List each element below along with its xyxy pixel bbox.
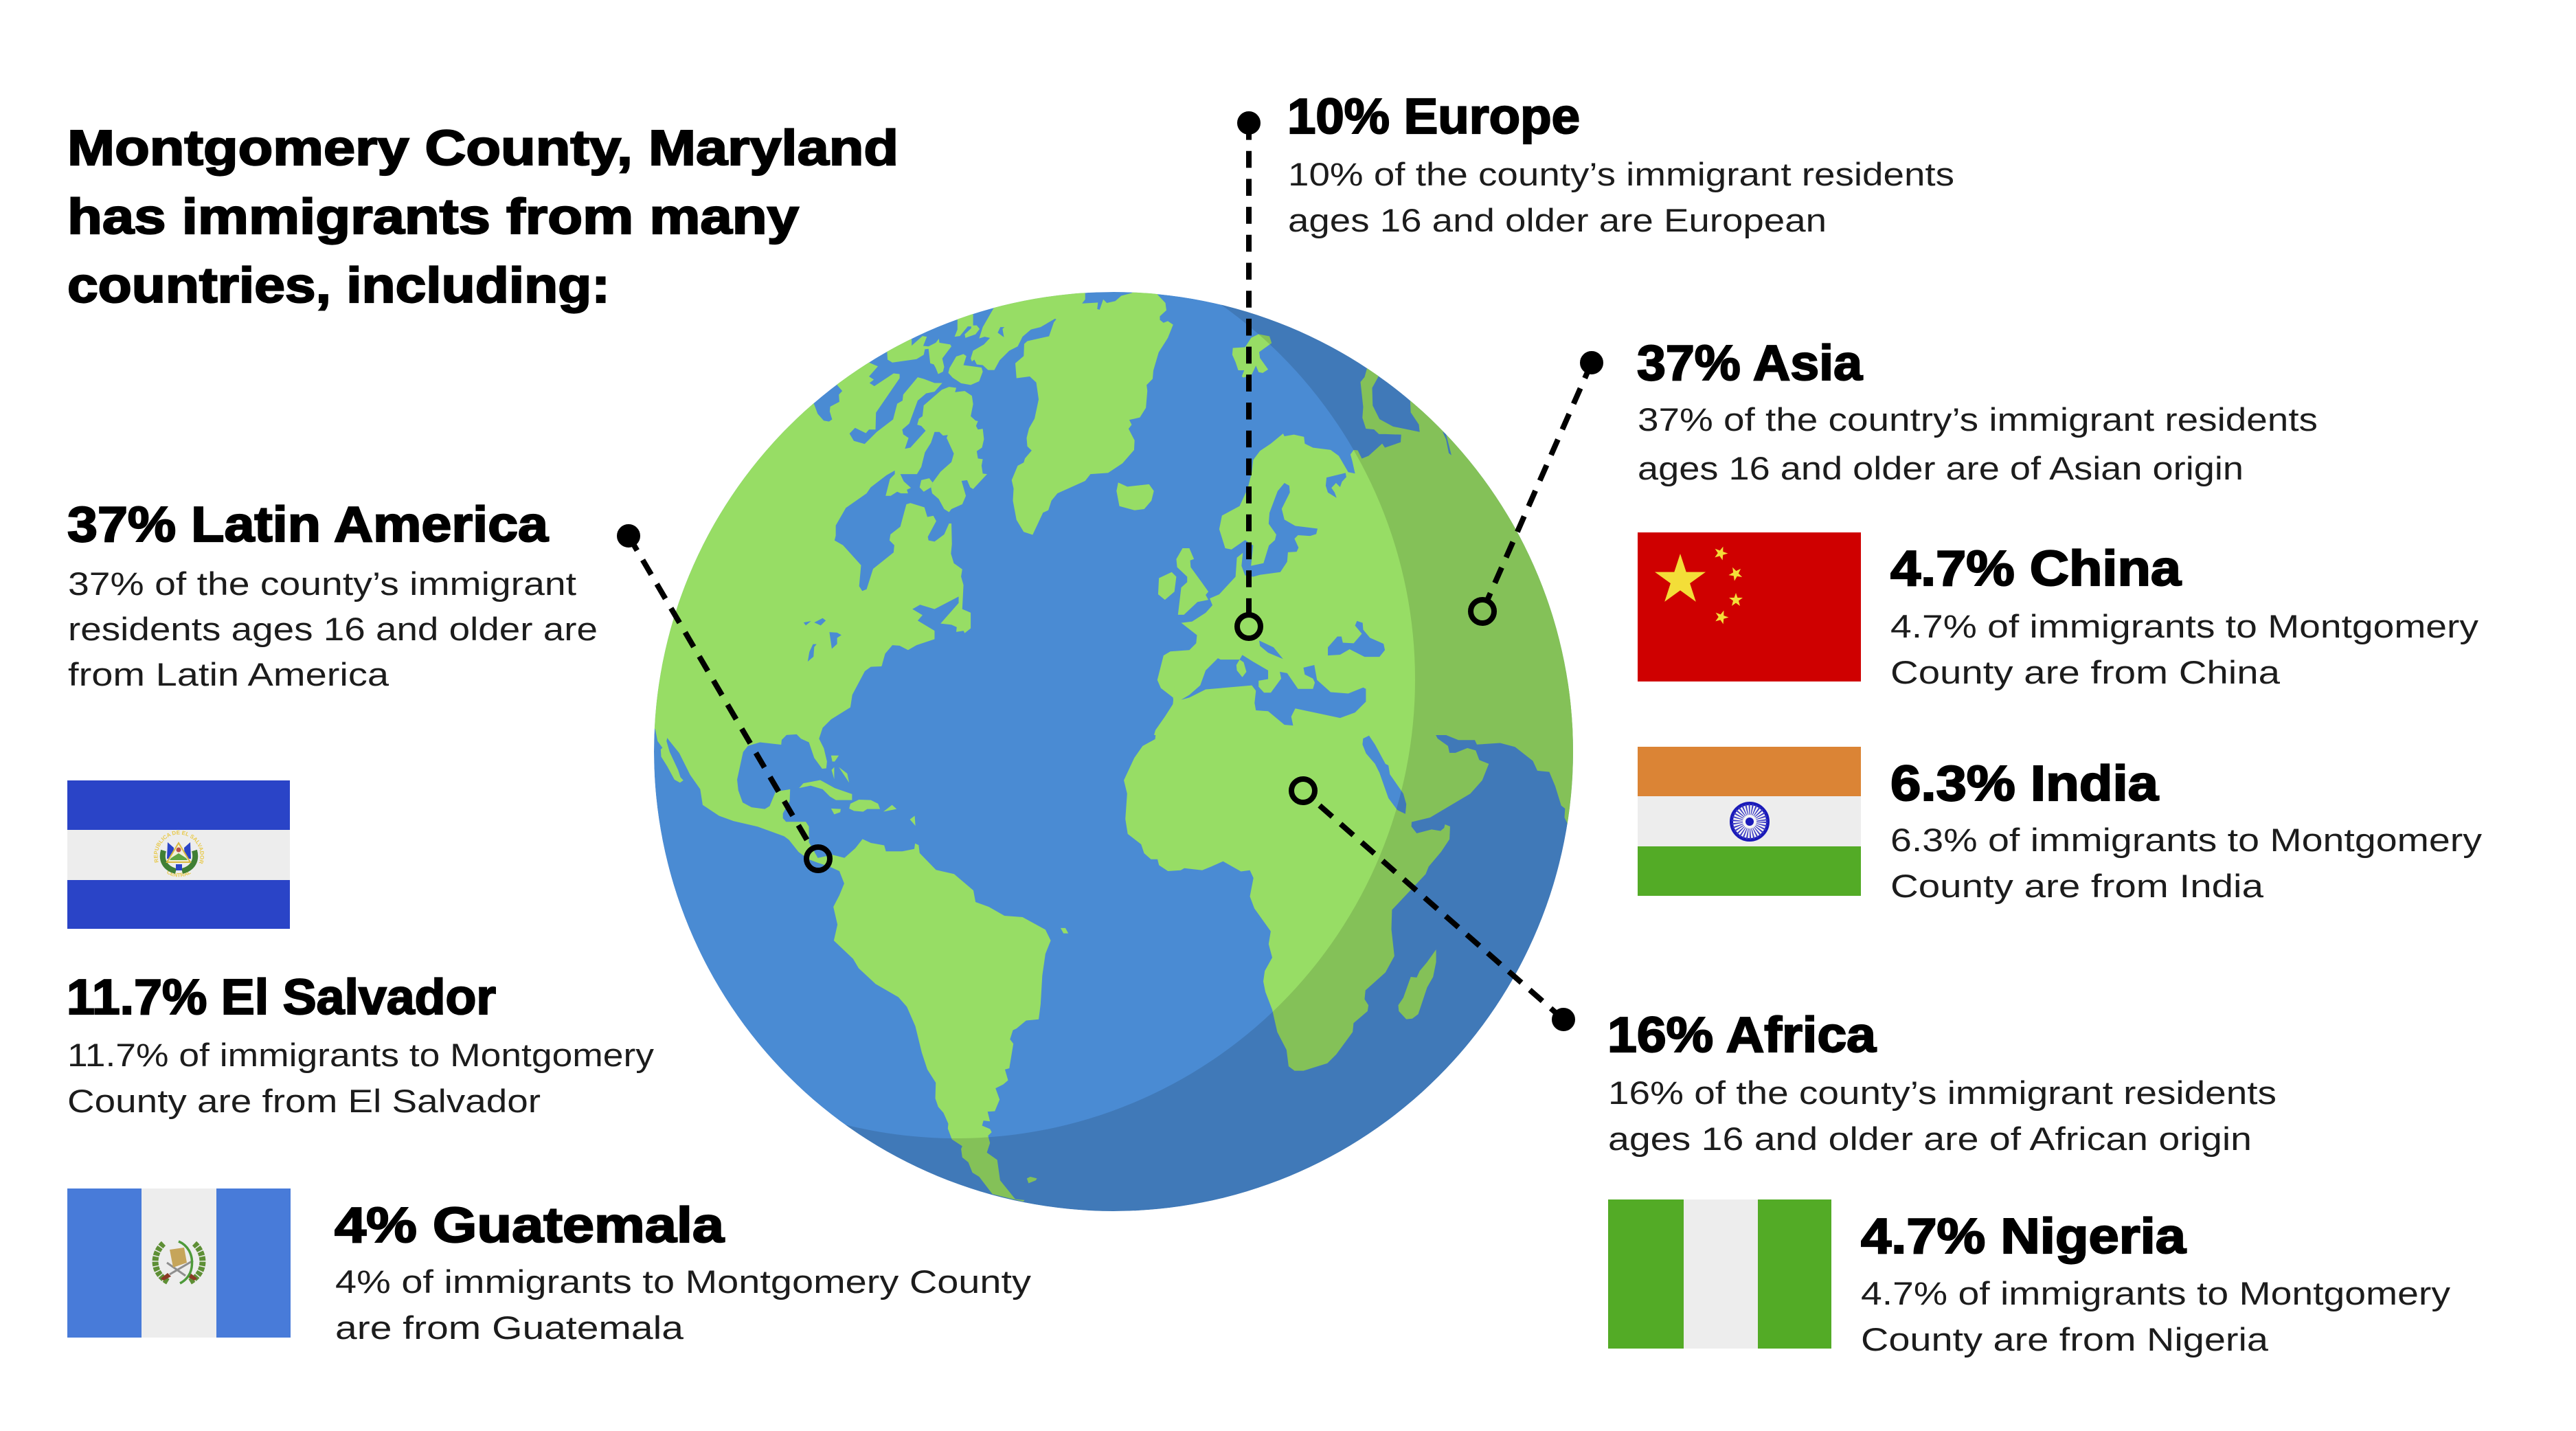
flag: China bbox=[1638, 532, 1861, 681]
pointer: Europe bbox=[1237, 114, 1261, 638]
land: Africa and Arabia bbox=[1124, 679, 1596, 1071]
icon: El Salvador emblem bbox=[154, 831, 204, 877]
land: Ireland bbox=[1158, 572, 1176, 600]
land: Madagascar bbox=[1398, 949, 1436, 1019]
flag: Guatemala bbox=[67, 1188, 291, 1338]
flag: India bbox=[1638, 747, 1861, 896]
title bbox=[67, 121, 899, 313]
land: North America and Arctic bbox=[646, 290, 1173, 666]
flag: Nigeria bbox=[1608, 1199, 1831, 1349]
icon: El Salvador emblem: CENTRAL bbox=[167, 871, 191, 877]
text block: El Salvador: 11.7% of immigrants to Montgomery bbox=[67, 1037, 655, 1073]
icon: Ashoka chakra bbox=[1731, 804, 1768, 840]
pointer: Africa bbox=[1291, 779, 1572, 1028]
text block: Asia: 37% Asia bbox=[1637, 336, 1863, 391]
text block: Europe: 10% Europe bbox=[1287, 89, 1580, 144]
text block: El Salvador: County are from El Salvador bbox=[67, 1083, 541, 1119]
Great Lakes bbox=[804, 618, 841, 662]
text block: Africa: ages 16 and older are of African origin bbox=[1608, 1120, 2252, 1157]
text block: El Salvador bbox=[67, 970, 655, 1119]
title: Montgomery County, Maryland bbox=[67, 121, 899, 176]
land: Eurasia bbox=[1154, 334, 1616, 735]
globe bbox=[654, 292, 1573, 1211]
text block: India: 6.3% of immigrants to Montgomery bbox=[1890, 822, 2483, 858]
text block: China: County are from China bbox=[1890, 654, 2281, 690]
icon: Guatemala emblem bbox=[155, 1241, 203, 1283]
pointer: Asia bbox=[1471, 354, 1601, 623]
text block: China: 4.7% of immigrants to Montgomery bbox=[1890, 608, 2479, 644]
text block: Latin America bbox=[67, 497, 598, 692]
text block: Africa bbox=[1607, 1008, 2276, 1157]
text block: Latin America: from Latin America bbox=[68, 656, 389, 692]
text block: El Salvador: 11.7% El Salvador bbox=[67, 970, 496, 1025]
text block: Nigeria: 4.7% of immigrants to Montgomery bbox=[1861, 1275, 2451, 1311]
text block: Latin America: 37% Latin America bbox=[67, 497, 549, 552]
text block: India bbox=[1890, 756, 2483, 904]
text block: Nigeria: County are from Nigeria bbox=[1861, 1321, 2269, 1357]
text block: Nigeria: 4.7% Nigeria bbox=[1861, 1209, 2187, 1264]
text block: Guatemala: 4% Guatemala bbox=[335, 1198, 725, 1253]
land: Central America and Caribbean bbox=[654, 618, 916, 865]
text block: Asia: ages 16 and older are of Asian origin bbox=[1638, 450, 2244, 486]
text block: Africa: 16% Africa bbox=[1607, 1008, 1877, 1063]
land: Britain bbox=[1176, 548, 1208, 615]
text block: Africa: 16% of the county’s immigrant residents bbox=[1608, 1074, 2276, 1111]
pointer: Latin America bbox=[620, 527, 830, 870]
text block: Latin America: residents ages 16 and older are bbox=[68, 611, 598, 647]
land: Greenland bbox=[971, 290, 1173, 535]
text block: India: County are from India bbox=[1890, 868, 2264, 904]
icon: China stars bbox=[1655, 544, 1745, 625]
text block: China: 4.7% China bbox=[1890, 541, 2182, 596]
text block: Guatemala: 4% of immigrants to Montgomery County bbox=[335, 1263, 1032, 1300]
text block: Latin America: 37% of the county’s immigrant bbox=[68, 565, 576, 602]
text block: Asia bbox=[1637, 336, 2318, 486]
text block: India: 6.3% India bbox=[1890, 756, 2159, 811]
text block: Europe: ages 16 and older are European bbox=[1288, 202, 1827, 238]
text block: Europe: 10% of the county’s immigrant residents bbox=[1288, 156, 1954, 192]
land: Iceland bbox=[1116, 482, 1154, 510]
text block: China bbox=[1890, 541, 2479, 690]
title: countries, including: bbox=[67, 258, 610, 313]
flag: El Salvador bbox=[67, 780, 290, 929]
text block: Europe bbox=[1287, 89, 1954, 238]
land: South America bbox=[829, 839, 1068, 1202]
land: Svalbard bbox=[1232, 334, 1272, 378]
seas: Mediterranean, Black Sea, White Sea bbox=[1182, 431, 1451, 725]
text block: Guatemala bbox=[335, 1198, 1032, 1346]
sea: Red Sea bbox=[1362, 736, 1406, 814]
title: has immigrants from many bbox=[67, 190, 799, 245]
text block: Guatemala: are from Guatemala bbox=[335, 1309, 684, 1346]
globe shadow crescent bbox=[845, 305, 1573, 1211]
text block: Asia: 37% of the country’s immigrant residents bbox=[1638, 401, 2318, 438]
icon: El Salvador emblem: REPUBLICA DE EL SALVADOR EN LA AMERICA bbox=[154, 831, 204, 864]
text block: Nigeria bbox=[1861, 1209, 2451, 1357]
